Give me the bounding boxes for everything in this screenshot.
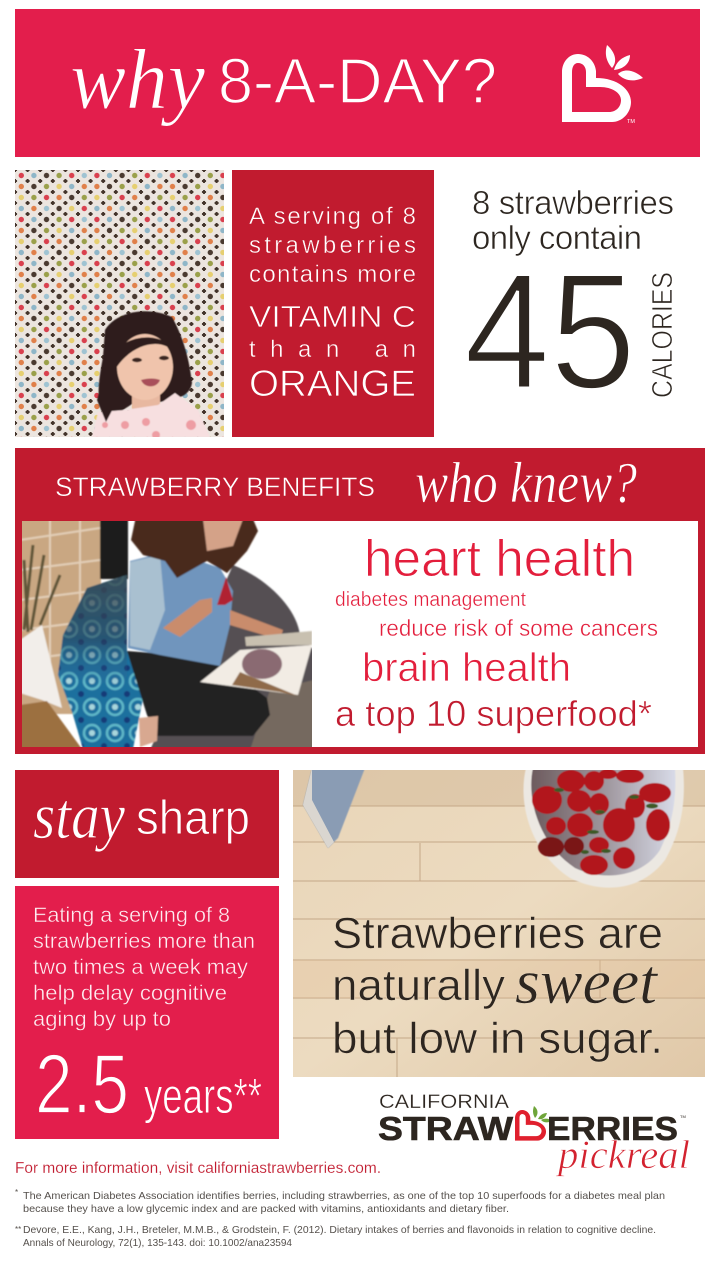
title: why 8-A-DAY?: 8-A-DAY? — [218, 45, 497, 117]
text: benefits list: a top 10 superfood* — [335, 693, 652, 734]
text: benefits list: brain health — [362, 646, 571, 690]
title: why 8-A-DAY?: why — [70, 31, 206, 127]
logo: California Strawberries pick real: pickreal — [555, 1132, 690, 1177]
text: naturally sweet but low in sugar: naturally — [332, 961, 505, 1010]
text: serving comparison: contains more — [249, 261, 416, 288]
text: benefits list: reduce risk of some cancers — [379, 615, 658, 641]
callout: 45 calories: 8 strawberries — [472, 184, 674, 221]
text: serving comparison: A serving of 8 — [249, 203, 416, 230]
icon: heart B logo — [562, 45, 643, 125]
text: cognitive aging: help delay cognitive — [33, 982, 227, 1005]
heading: strawberry benefits: STRAWBERRY BENEFITS — [55, 472, 375, 502]
panel: strawberry benefits — [15, 448, 705, 754]
text: footnotes — [15, 1188, 665, 1249]
text: cognitive aging — [33, 904, 255, 1031]
photo: girl against polka dot wall — [15, 170, 224, 439]
panel: cognitive aging statistic — [15, 886, 279, 1139]
text: naturally sweet but low in sugar: but low in sugar. — [332, 1014, 663, 1063]
text: cognitive aging: two times a week may — [33, 956, 249, 979]
icon: bowl of strawberries — [523, 768, 684, 888]
panel: stay sharp heading — [15, 770, 279, 878]
text: serving comparison: ORANGE — [249, 363, 416, 404]
text: naturally sweet but low in sugar — [332, 909, 663, 1063]
logo: California Strawberries pick real: CALIFORNIA — [379, 1092, 509, 1113]
callout: 45 calories — [464, 184, 679, 423]
callout: 45 calories: only contain — [472, 219, 642, 256]
icon: shoe — [303, 768, 365, 848]
panel: naturally sweet photo — [293, 768, 705, 1077]
number: 2.5 years: 2.5 — [35, 1037, 129, 1131]
text: benefits list: heart health — [364, 530, 635, 588]
panel: vitamin C — [232, 170, 434, 437]
number: 2.5 years: years** — [144, 1068, 262, 1124]
icon: heart B — [515, 1110, 546, 1141]
text: benefits list — [335, 530, 658, 734]
text: cognitive aging: strawberries more than — [33, 930, 255, 953]
panel: stay sharp heading: stay — [33, 780, 126, 853]
callout: 45 calories: CALORIES — [647, 272, 679, 398]
title: why 8-A-DAY? — [70, 31, 497, 127]
text: more information link: For more information, visit californiastrawberries.com. — [15, 1160, 381, 1177]
icon: heart B logo: TM — [627, 119, 635, 125]
text: footnotes: Devore, E.E., Kang, J.H., Breteler, M.M.B., & Grodstein, F. (2012). Dietary intakes of berries and flavonoids in relation to cognitive decline. — [23, 1224, 656, 1236]
text: benefits list: diabetes management — [335, 589, 526, 611]
text: cognitive aging: Eating a serving of 8 — [33, 904, 230, 927]
text: footnotes: because they have a low glycemic index and are packed with vitamins, antioxidants and dietary fiber. — [23, 1203, 509, 1215]
text: serving comparison: VITAMIN C — [249, 299, 416, 334]
text: serving comparison — [249, 203, 416, 404]
callout: 45 calories: 45 — [464, 239, 636, 423]
logo: California Strawberries pick real — [378, 1092, 690, 1177]
text: naturally sweet but low in sugar: Strawberries are — [332, 909, 663, 958]
text: naturally sweet but low in sugar: sweet — [515, 946, 659, 1017]
text: serving comparison: strawberries — [249, 232, 416, 259]
text: footnotes: The American Diabetes Association identifies berries, including strawberries, as one of the top 10 superfoods for a diabetes meal plan — [23, 1190, 665, 1202]
text: footnotes: * — [15, 1188, 18, 1197]
heading: who knew?: who knew? — [415, 450, 637, 515]
text: serving comparison: than an — [249, 336, 416, 363]
number: 2.5 years — [35, 1037, 262, 1131]
text: footnotes: ** — [15, 1225, 21, 1234]
text: cognitive aging: aging by up to — [33, 1008, 171, 1031]
photo: woman reading with a strawberry — [20, 519, 314, 750]
logo: California Strawberries pick real: ERRIES — [547, 1110, 678, 1147]
panel: stay sharp heading: sharp — [136, 792, 250, 845]
logo: California Strawberries pick real: STRAW — [378, 1110, 514, 1147]
text: footnotes: Annals of Neurology, 72(1), 135-143. doi: 10.1002/ana23594 — [23, 1237, 292, 1249]
panel: title banner — [15, 9, 700, 157]
logo: California Strawberries pick real: TM — [680, 1114, 686, 1119]
